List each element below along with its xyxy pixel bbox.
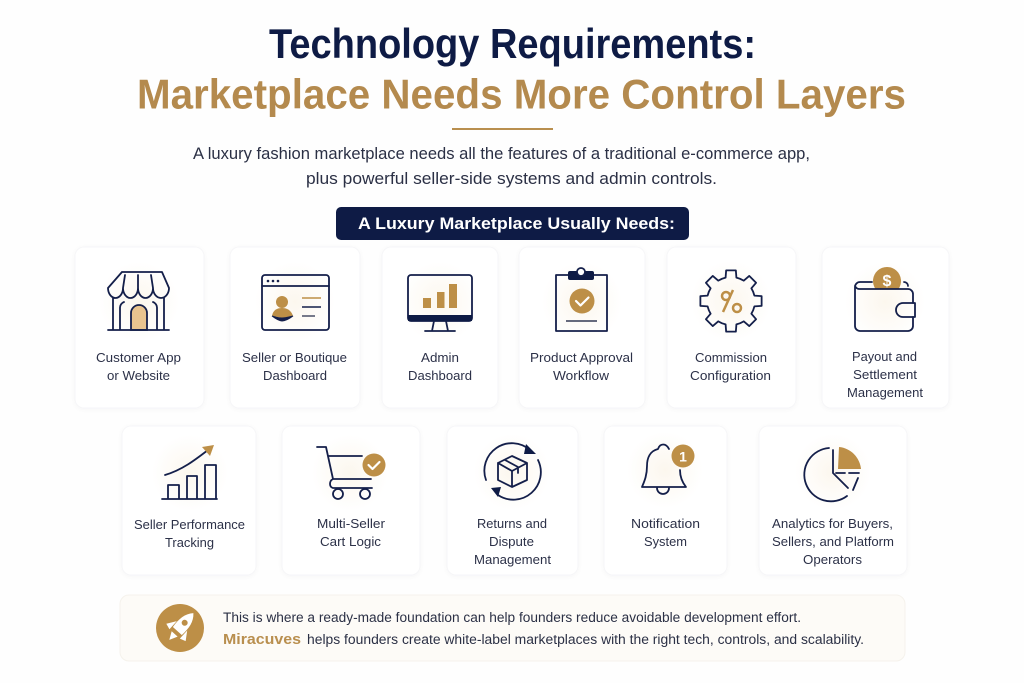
icon: rocket badge	[156, 604, 204, 652]
title: Marketplace Needs More Control Layers	[137, 70, 906, 118]
label: Seller or Boutique	[242, 351, 347, 365]
title: Technology Requirements:	[269, 20, 756, 67]
panel: seller dashboard	[230, 247, 360, 408]
label: Commission	[695, 351, 767, 365]
panel: analytics	[759, 426, 907, 575]
label	[847, 350, 924, 400]
icon: wallet with coin: $	[883, 273, 892, 290]
label	[772, 517, 894, 567]
label	[408, 351, 472, 383]
icon: wallet with coin	[855, 267, 915, 331]
label: Payout and	[852, 350, 917, 364]
icon: gear with percent	[700, 270, 762, 332]
icon: seller window	[262, 275, 329, 330]
label: Returns and	[477, 517, 547, 531]
icon: monitor with bars	[408, 275, 472, 331]
label: Dispute	[489, 535, 534, 549]
label: Dashboard	[408, 369, 472, 383]
title	[137, 20, 906, 118]
icon: cart with check	[317, 447, 386, 499]
label: System	[644, 535, 687, 549]
label	[242, 351, 347, 383]
icon: bell with badge: 1	[679, 448, 687, 464]
intro paragraph: plus powerful seller-side systems and admin controls.	[306, 170, 717, 188]
intro paragraph	[193, 145, 810, 188]
label: Notification	[631, 517, 700, 531]
label: Workflow	[553, 369, 610, 383]
label	[474, 517, 552, 567]
label	[530, 351, 633, 383]
label: Management	[474, 553, 552, 567]
section heading pill: A Luxury Marketplace Usually Needs:	[358, 214, 675, 233]
label: Settlement	[853, 368, 918, 382]
panel: commission configuration	[667, 247, 796, 408]
callout text: Miracuves	[223, 631, 301, 648]
label: Multi-Seller	[317, 517, 385, 531]
icon: clipboard check	[556, 268, 607, 331]
label	[690, 351, 771, 383]
label	[134, 518, 245, 550]
section heading pill	[336, 207, 689, 240]
icon: pie chart	[804, 447, 861, 501]
divider rule	[452, 128, 553, 130]
panel: customer app	[75, 247, 204, 408]
label: Operators	[803, 553, 862, 567]
callout text: helps founders create white-label marketplaces with the right tech, controls, and scalability.	[307, 632, 864, 647]
label	[631, 517, 700, 549]
panel: product approval	[519, 247, 645, 408]
label: Admin	[421, 351, 459, 365]
label: Configuration	[690, 369, 771, 383]
panel: multi-seller cart	[282, 426, 420, 575]
label: Analytics for Buyers,	[772, 517, 893, 531]
label	[317, 517, 385, 549]
icon: returns cycle with box	[484, 443, 541, 500]
callout banner	[120, 595, 905, 661]
panel: notification	[604, 426, 727, 575]
label: Tracking	[165, 536, 214, 550]
label: Management	[847, 386, 924, 400]
panel: payout and settlement	[822, 247, 949, 408]
icon: storefront	[108, 272, 169, 330]
label: or Website	[107, 369, 170, 383]
label: Product Approval	[530, 351, 633, 365]
label: Dashboard	[263, 369, 327, 383]
callout text: This is where a ready-made foundation can help founders reduce avoidable development effort.	[223, 610, 801, 625]
panel: seller performance	[122, 426, 256, 575]
icon: growth chart	[162, 445, 217, 499]
label: Sellers, and Platform	[772, 535, 894, 549]
panel: returns and dispute	[447, 426, 578, 575]
panel: admin dashboard	[382, 247, 498, 408]
callout text	[223, 610, 864, 648]
icon: bell with badge	[642, 444, 694, 494]
label: Customer App	[96, 351, 181, 365]
label	[96, 351, 181, 383]
label: Seller Performance	[134, 518, 245, 532]
label: Cart Logic	[320, 535, 381, 549]
intro paragraph: A luxury fashion marketplace needs all the features of a traditional e-commerce app,	[193, 145, 810, 163]
